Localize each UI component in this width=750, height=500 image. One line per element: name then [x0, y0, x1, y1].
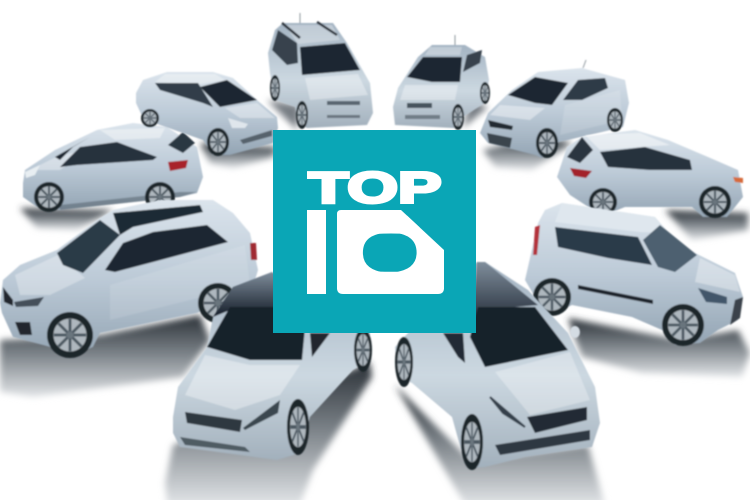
car: minivan, top	[268, 13, 373, 129]
car: sedan, bottom left	[173, 272, 372, 460]
title: TOP: TOP	[308, 164, 442, 212]
title: 10: 1	[280, 186, 347, 320]
car: hatchback, right	[557, 130, 743, 218]
car: coupe, upper right	[480, 60, 629, 158]
car: hatchback, upper left	[23, 123, 203, 212]
car: sedan, top	[393, 35, 490, 130]
car: large SUV, left	[0, 200, 258, 358]
title: 10	[307, 210, 444, 294]
title: 10: 0	[179, 194, 602, 311]
teal badge	[273, 130, 476, 333]
car: compact SUV, bottom right	[395, 262, 600, 470]
car shadows	[0, 100, 750, 500]
car: sedan, upper left	[136, 72, 278, 156]
car: boxy crossover, right	[525, 203, 743, 346]
